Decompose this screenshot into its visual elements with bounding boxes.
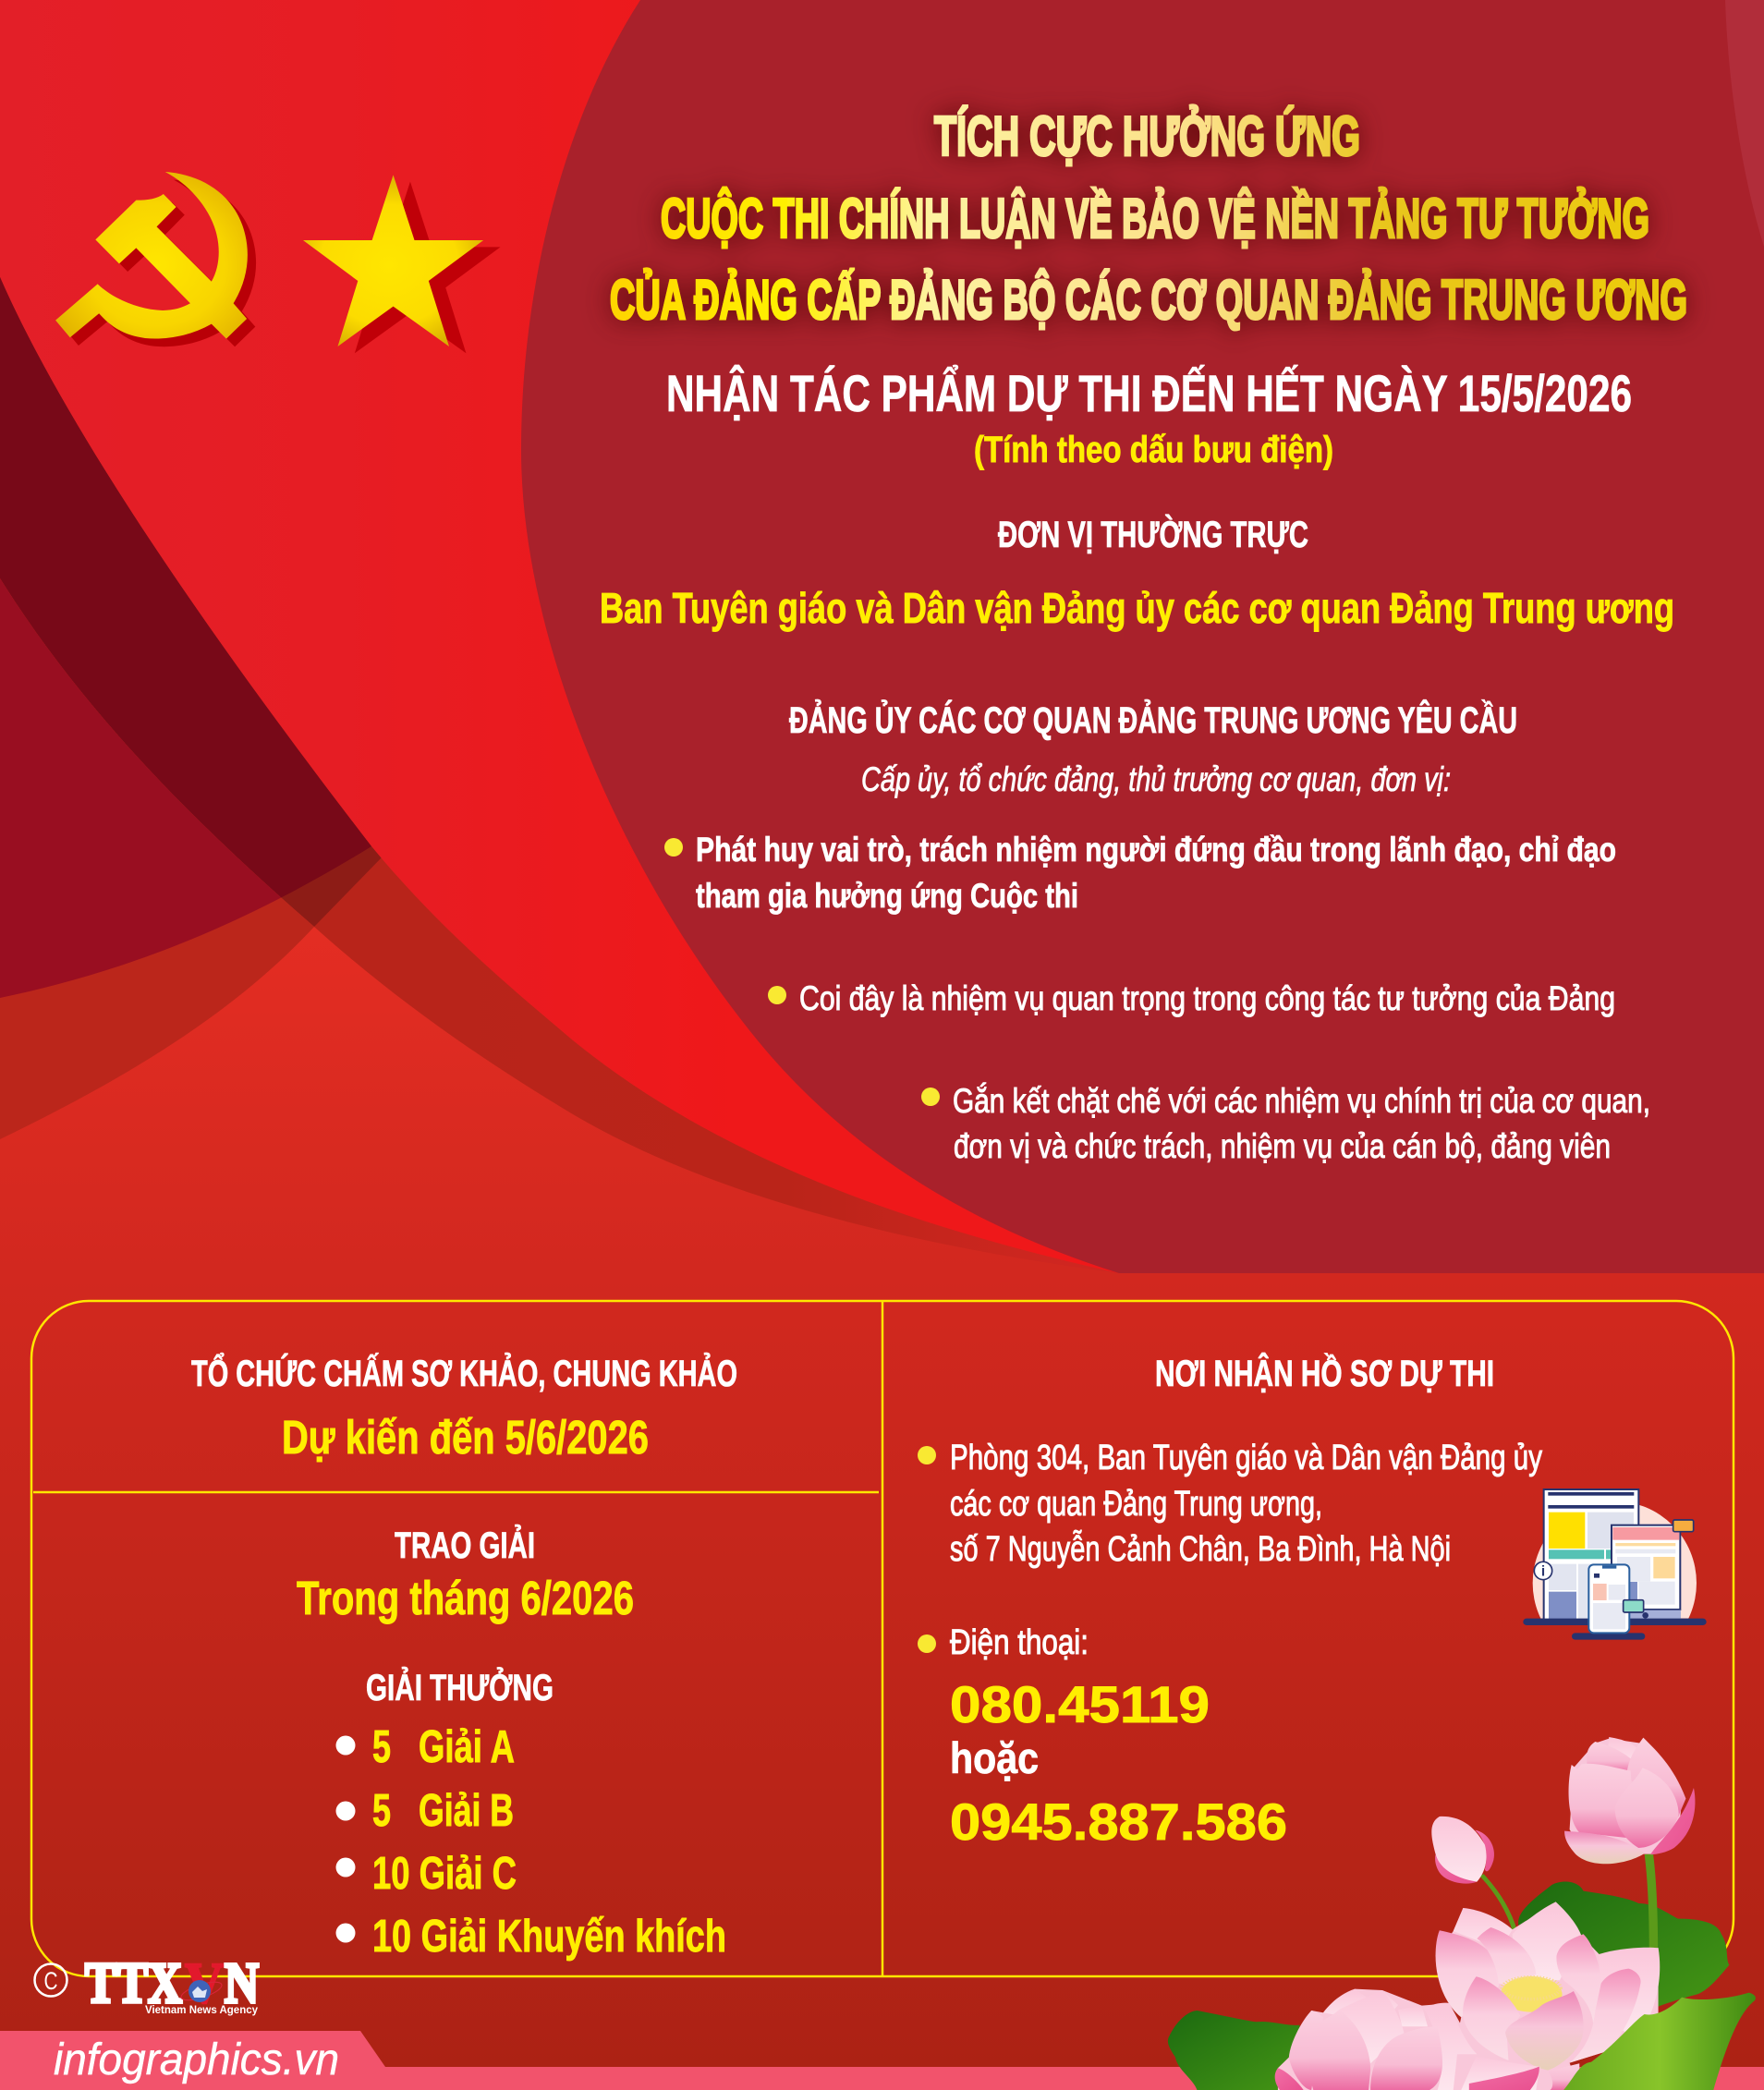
panel: prizes: Giải A bbox=[419, 1722, 515, 1772]
logo: TTXVN: Vietnam News Agency bbox=[145, 2005, 259, 2016]
title: TÍCH CỰC HƯỞNG ỨNG bbox=[934, 105, 1360, 167]
background: lower panel bbox=[0, 1273, 1764, 2090]
panel: prizes: Giải B bbox=[419, 1786, 514, 1836]
panel: submission address: NƠI NHẬN HỒ SƠ DỰ THI bbox=[1155, 1352, 1494, 1394]
panel: prizes: 10 Giải C bbox=[372, 1849, 517, 1899]
title bbox=[610, 105, 1687, 331]
background: top-right light arc bbox=[1725, 0, 1764, 247]
requirement bullet 3: đơn vị và chức trách, nhiệm vụ của cán bộ, đảng viên bbox=[954, 1127, 1611, 1165]
requirement bullet 1: tham gia hưởng ứng Cuộc thi bbox=[696, 877, 1078, 915]
copyright mark: C bbox=[44, 1967, 57, 1995]
icon: digital news devices: i bbox=[1541, 1564, 1545, 1580]
website label: infographics.vn bbox=[54, 2035, 339, 2084]
standing unit heading: ĐƠN VỊ THƯỜNG TRỰC bbox=[998, 513, 1308, 555]
panel: phone numbers: 0945.887.586 bbox=[950, 1792, 1287, 1851]
background: sweeping dark crescents bbox=[0, 277, 1118, 1273]
panel: phone numbers bbox=[918, 1623, 1287, 1851]
panel: prizes: 5 bbox=[372, 1786, 391, 1836]
panel: submission address bbox=[918, 1352, 1542, 1569]
stem: small bud bbox=[1481, 1875, 1515, 1930]
icon: hammer and sickle bbox=[55, 172, 256, 346]
panel: phone numbers: Điện thoại: bbox=[950, 1623, 1089, 1662]
copyright mark bbox=[35, 1964, 67, 1996]
leaf: back right bbox=[1518, 1882, 1729, 2007]
panel: submission address: các cơ quan Đảng Trung ương, bbox=[950, 1485, 1322, 1524]
logo: TTXVN: N bbox=[225, 1952, 259, 2015]
logo: TTXVN: V bbox=[185, 1952, 224, 2015]
background: dark crimson circle bbox=[521, 0, 1764, 1275]
panel: prizes: 5 bbox=[372, 1722, 391, 1772]
panel: award ceremony: TRAO GIẢI bbox=[395, 1524, 535, 1566]
leaf: front right bbox=[1563, 1993, 1756, 2090]
panel: submission address: Phòng 304, Ban Tuyên giáo và Dân vận Đảng ủy bbox=[950, 1439, 1542, 1477]
flower: tall bud bbox=[1564, 1737, 1695, 1864]
panel: judging schedule: Dự kiến đến 5/6/2026 bbox=[282, 1411, 649, 1464]
illustration: lotus flowers and leaves bbox=[1168, 1737, 1756, 2090]
panel: prizes: GIẢI THƯỞNG bbox=[366, 1666, 554, 1708]
flower: large open lotus bbox=[1436, 1902, 1660, 2090]
icon: yellow star bbox=[303, 175, 501, 353]
bottom pink band bbox=[0, 2031, 1764, 2090]
panel: phone numbers: hoặc bbox=[950, 1733, 1039, 1782]
panel: prizes bbox=[336, 1666, 726, 1962]
icon: digital news devices bbox=[1523, 1489, 1707, 1640]
logo: TTXVN: TTX bbox=[85, 1952, 182, 2015]
panel: judging schedule bbox=[191, 1351, 737, 1464]
panel: phone numbers: 080.45119 bbox=[950, 1675, 1210, 1733]
requirements subheading: Cấp ủy, tổ chức đảng, thủ trưởng cơ quan, đơn vị: bbox=[861, 760, 1451, 798]
panel: award ceremony: Trong tháng 6/2026 bbox=[297, 1572, 634, 1624]
flower: lower left lotus bbox=[1275, 1989, 1477, 2090]
background: bright red bbox=[0, 0, 1764, 1275]
panel: judging schedule: TỔ CHỨC CHẤM SƠ KHẢO, CHUNG KHẢO bbox=[191, 1351, 737, 1394]
stem: tall bud bbox=[1648, 1854, 1653, 1952]
leaf: bottom left bbox=[1168, 2011, 1304, 2090]
logo: TTXVN bbox=[85, 1952, 259, 2016]
requirement bullet 3 bbox=[921, 1082, 1650, 1165]
flower: small bud bbox=[1431, 1817, 1494, 1884]
panel: prizes: 10 Giải Khuyến khích bbox=[372, 1912, 726, 1962]
bottom info frame bbox=[31, 1301, 1734, 1976]
panel: submission address: số 7 Nguyễn Cảnh Chân, Ba Đình, Hà Nội bbox=[950, 1529, 1451, 1569]
panel: award ceremony bbox=[297, 1524, 634, 1624]
requirement bullet 1 bbox=[664, 831, 1616, 915]
deadline note: (Tính theo dấu bưu điện) bbox=[974, 430, 1333, 470]
